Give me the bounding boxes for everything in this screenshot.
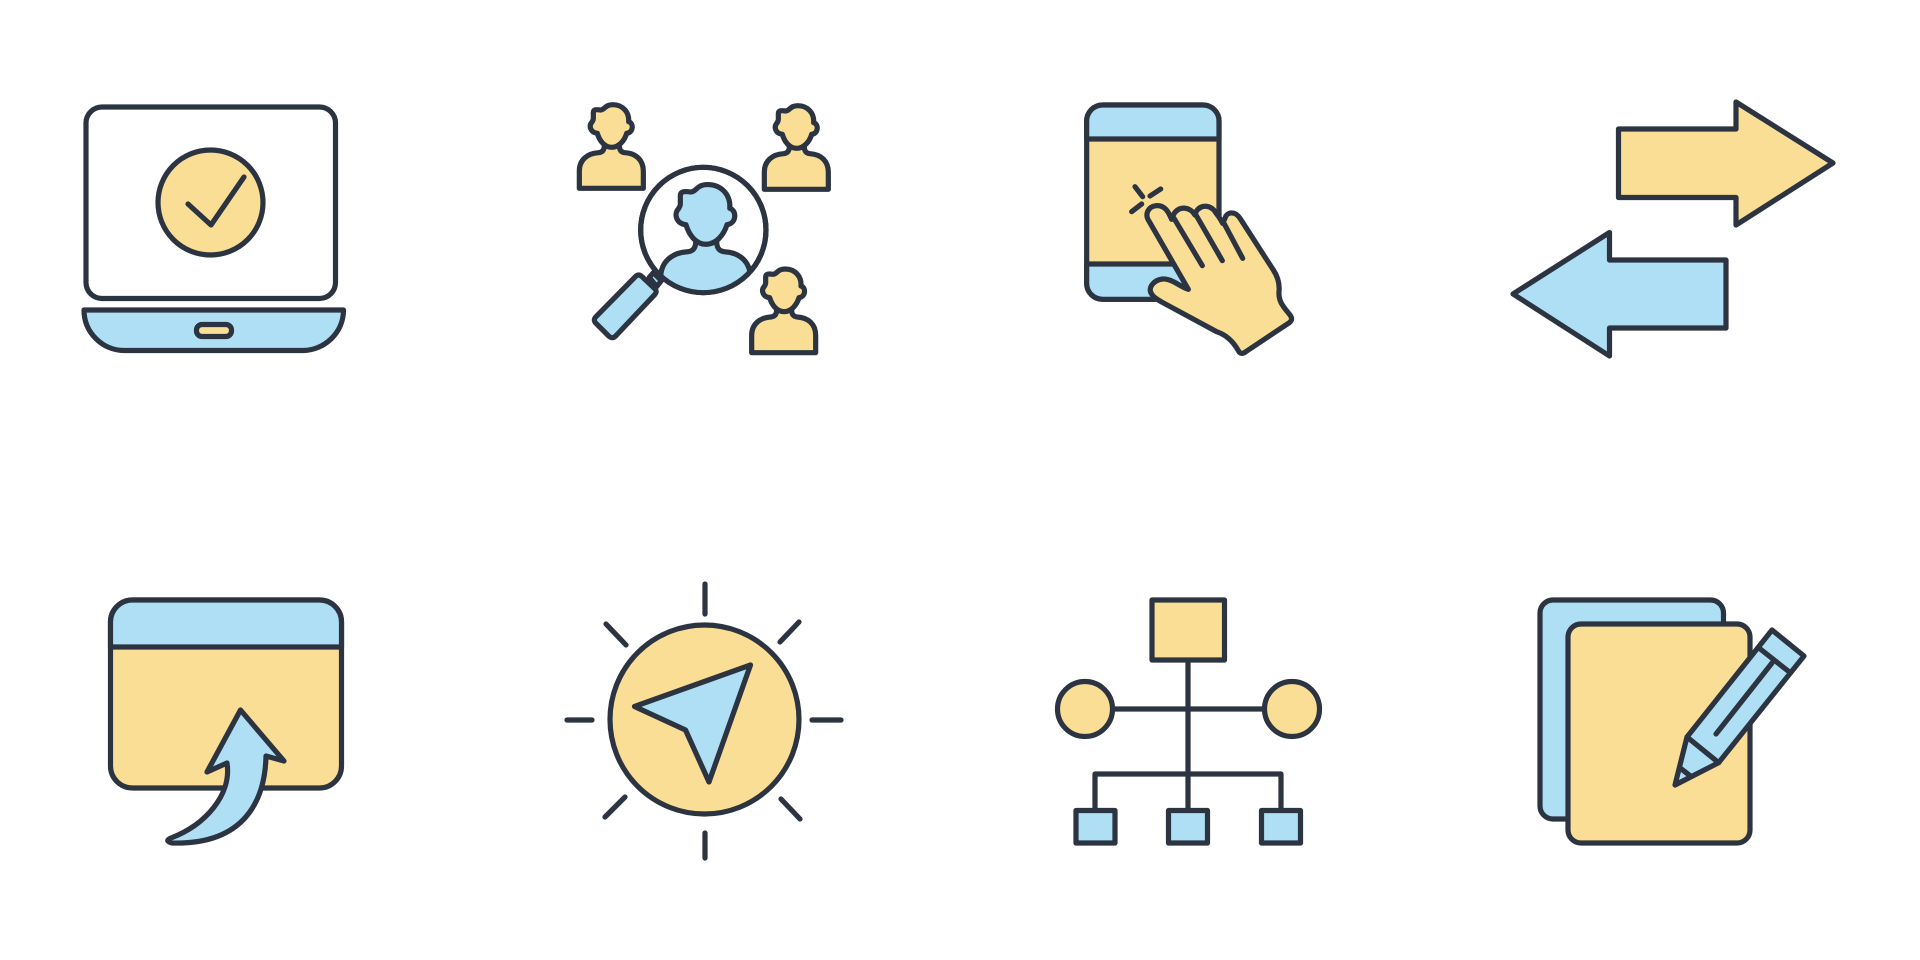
- laptop base: [84, 310, 344, 350]
- upload arrow: [168, 710, 284, 843]
- window title bar: [110, 600, 342, 647]
- icon: window with upload arrow: [110, 600, 342, 843]
- icon: people search with magnifier: [579, 105, 828, 353]
- right circle node: [1264, 682, 1320, 736]
- laptop screen: [86, 107, 336, 298]
- icon: laptop with check mark: [84, 107, 344, 350]
- icon: tablet with tapping hand: [1087, 105, 1292, 353]
- icon: navigation compass with rays: [567, 584, 841, 858]
- hand: [1147, 206, 1292, 353]
- front sheet: [1568, 624, 1750, 843]
- window body: [110, 600, 342, 788]
- compass disc: [610, 625, 799, 814]
- child node right: [1262, 810, 1300, 843]
- rays: [567, 584, 841, 858]
- left circle node: [1058, 682, 1112, 736]
- check badge: [158, 150, 263, 255]
- person bottom right: [752, 269, 816, 353]
- connector lines: [1095, 660, 1281, 810]
- top node: [1152, 600, 1224, 660]
- icon: documents with pencil: [1540, 600, 1804, 843]
- tablet body: [1087, 105, 1219, 299]
- icon: hierarchy diagram: [1058, 600, 1320, 843]
- tap sparks: [1132, 187, 1161, 212]
- icon set canvas: [81, 99, 1836, 861]
- person top left: [579, 105, 643, 188]
- child node left: [1076, 810, 1115, 843]
- person top right: [764, 106, 828, 189]
- magnifier lens with person: [641, 167, 766, 302]
- right arrow: [1618, 102, 1833, 225]
- child node middle: [1168, 810, 1208, 843]
- icon: exchange arrows: [1513, 102, 1833, 356]
- navigation pointer: [634, 665, 750, 782]
- laptop button: [196, 324, 232, 336]
- back sheet: [1540, 600, 1724, 819]
- magnifier handle: [594, 273, 661, 338]
- left arrow: [1513, 232, 1726, 356]
- pencil: [1675, 630, 1804, 785]
